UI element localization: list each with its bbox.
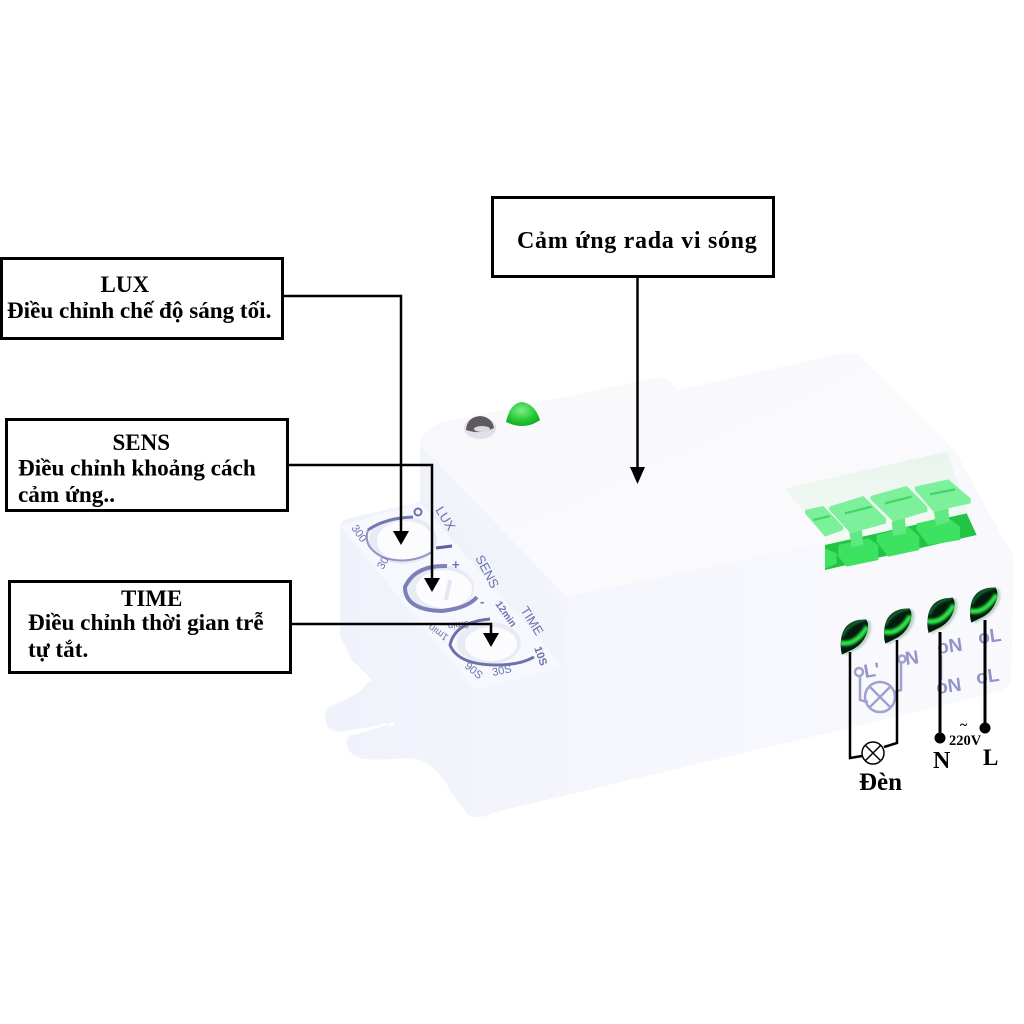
LEDs xyxy=(464,402,540,439)
callout: LUX xyxy=(2,258,282,338)
label: N: N xyxy=(933,748,951,774)
TIME dial: TIME xyxy=(517,604,547,638)
TIME dial: 90S xyxy=(462,660,485,682)
callout: microwave radar xyxy=(492,198,774,276)
arrow: TIME to dial xyxy=(291,624,499,647)
SENS dial xyxy=(405,552,502,611)
green terminal block xyxy=(785,452,977,570)
N wire xyxy=(934,632,946,744)
callout: TIME: TIME xyxy=(121,586,182,611)
callout: LUX: LUX xyxy=(100,272,149,297)
TIME dial: 12min xyxy=(493,599,518,629)
SENS dial: + xyxy=(452,557,460,572)
device: motion sensor module xyxy=(325,353,1014,817)
TIME dial: 1min xyxy=(427,621,451,643)
SENS dial: - xyxy=(480,594,484,609)
callout: LUX: Điều chỉnh chế độ sáng tối. xyxy=(7,297,271,323)
switch bases xyxy=(825,517,960,568)
callout: TIME: Điều chỉnh thời gian trễ xyxy=(28,610,264,636)
LUX dial: 30 xyxy=(375,555,392,572)
device: motion sensor module: oN xyxy=(936,635,964,659)
lamp circuit xyxy=(850,640,897,764)
TIME dial: 10S xyxy=(531,645,549,667)
wiring diagram xyxy=(850,620,990,764)
body silhouette with mounting tabs xyxy=(325,353,1014,817)
terminal holes xyxy=(840,587,1000,656)
arrow: LUX to dial xyxy=(283,296,409,545)
ledge surface with dials xyxy=(340,503,563,690)
arrow: radar to device xyxy=(630,277,645,484)
label: Đèn: Đèn xyxy=(859,769,902,796)
callout: SENS: cảm ứng.. xyxy=(18,482,115,508)
L wire xyxy=(980,620,990,734)
LUX dial xyxy=(349,504,459,572)
LUX dial: 300 xyxy=(349,523,369,545)
callout: SENS xyxy=(6,420,288,510)
label: 220V: 220V xyxy=(949,733,982,749)
switch tops xyxy=(805,479,971,537)
callout: TIME xyxy=(10,582,290,672)
printed wiring symbols xyxy=(855,655,941,712)
green LED xyxy=(506,402,540,426)
ledge wall xyxy=(420,445,567,667)
device: motion sensor module: oL xyxy=(975,665,1001,689)
LUX dial: LUX xyxy=(432,504,459,533)
label: L: L xyxy=(983,745,998,770)
light sensor lens xyxy=(464,416,496,439)
tab slit xyxy=(346,722,394,735)
callout: microwave radar: Cảm ứng rada vi sóng xyxy=(517,228,757,254)
top face xyxy=(420,353,950,597)
label: tilde: ~ xyxy=(960,718,968,733)
device: motion sensor module: L' xyxy=(862,659,882,683)
device: motion sensor module: N xyxy=(904,647,920,670)
switch stems xyxy=(849,508,949,547)
callout: SENS: SENS xyxy=(112,430,170,455)
device: motion sensor module: oN xyxy=(935,675,963,699)
TIME dial: 6min xyxy=(447,618,470,631)
arrow: SENS to dial xyxy=(288,465,440,592)
callout: SENS: Điều chỉnh khoảng cách xyxy=(18,456,256,482)
SENS dial: SENS xyxy=(472,552,502,591)
device: motion sensor module: oL xyxy=(977,625,1003,649)
callout: TIME: tự tắt. xyxy=(28,637,88,663)
TIME dial: 30S xyxy=(491,663,513,679)
TIME dial xyxy=(427,599,549,682)
